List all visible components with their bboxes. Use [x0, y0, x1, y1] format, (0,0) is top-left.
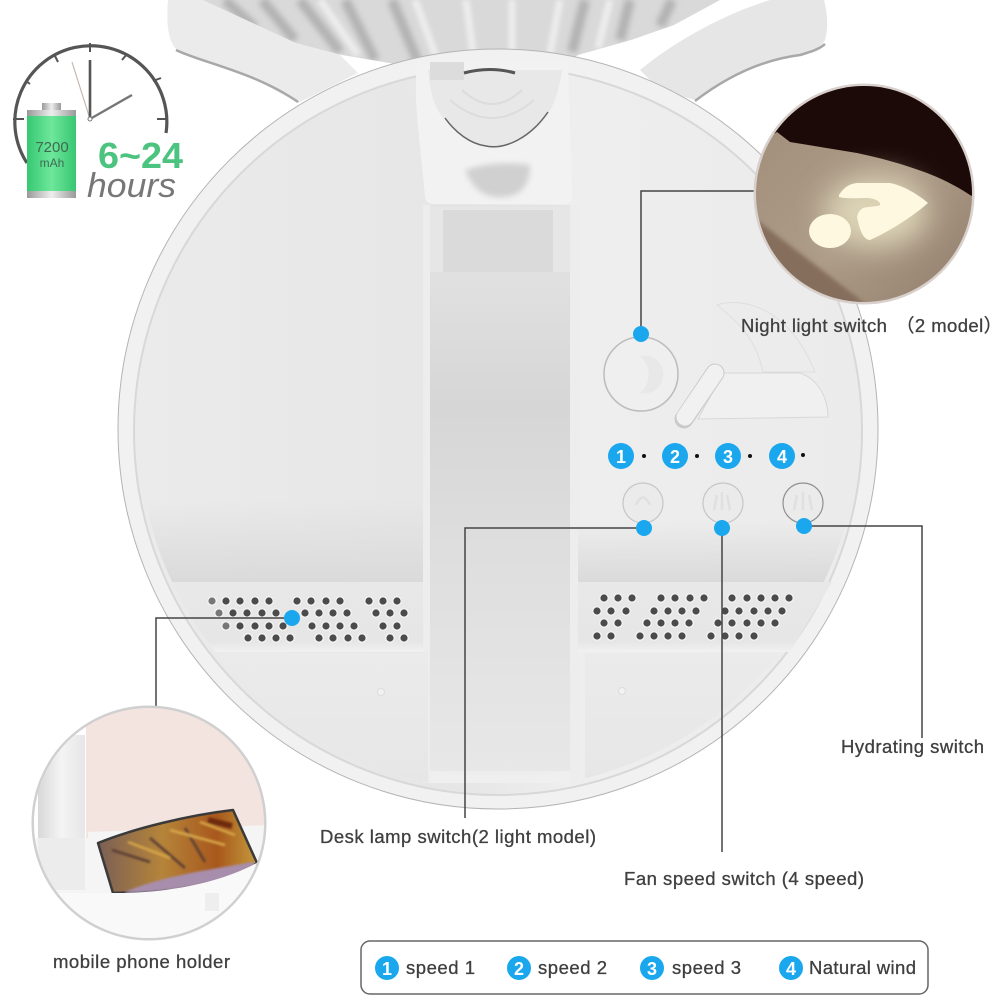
battery life heading: hours: [87, 167, 176, 205]
battery life heading: [87, 135, 183, 205]
night light label: （2 model）: [896, 315, 1000, 336]
clock with battery: [13, 43, 167, 198]
neck joint: [416, 60, 572, 204]
speed legend: 1: [382, 959, 392, 979]
battery: [27, 103, 76, 198]
desk lamp switch label: Desk lamp switch(2 light model): [320, 826, 596, 847]
speed legend: 2: [514, 959, 524, 979]
speed number badges: 1: [616, 447, 626, 467]
upper panel shading: [156, 540, 836, 582]
fan speed switch label: Fan speed switch (4 speed): [624, 868, 864, 889]
speed number badges: 3: [723, 447, 733, 467]
ribbed fan head: [204, 0, 720, 64]
left speaker band: [288, 650, 423, 652]
hydrating switch label: Hydrating switch: [841, 736, 984, 757]
battery: mAh: [40, 156, 64, 170]
right speaker holes: [593, 594, 793, 640]
mobile phone holder label: mobile phone holder: [53, 951, 230, 972]
speed legend: speed 3: [672, 957, 741, 978]
central channel: [423, 205, 578, 783]
round base disc: [118, 49, 878, 809]
fan wings: [167, 0, 827, 103]
speed legend: 3: [647, 959, 657, 979]
lower panels: [377, 687, 626, 696]
speed legend: speed 1: [406, 957, 475, 978]
battery: 7200: [35, 139, 69, 156]
leader lines and markers: [156, 191, 922, 852]
moon and cloud relief: [684, 303, 828, 419]
night light button: [604, 337, 678, 411]
speed legend: speed 2: [538, 957, 607, 978]
speed legend: 4: [786, 959, 796, 979]
speed number badges: [608, 443, 805, 469]
battery life heading: 6~24: [98, 135, 183, 176]
left speaker holes: [208, 597, 408, 642]
speed buttons: [623, 483, 823, 523]
right speaker band: [578, 582, 832, 652]
speed number badges: 4: [777, 447, 787, 467]
night light photo: [754, 84, 974, 304]
night light label: Night light switch: [741, 315, 887, 336]
speed legend: [361, 941, 928, 994]
speed legend: Natural wind: [809, 957, 916, 978]
speed number badges: 2: [670, 447, 680, 467]
phone holder photo: [30, 705, 270, 945]
